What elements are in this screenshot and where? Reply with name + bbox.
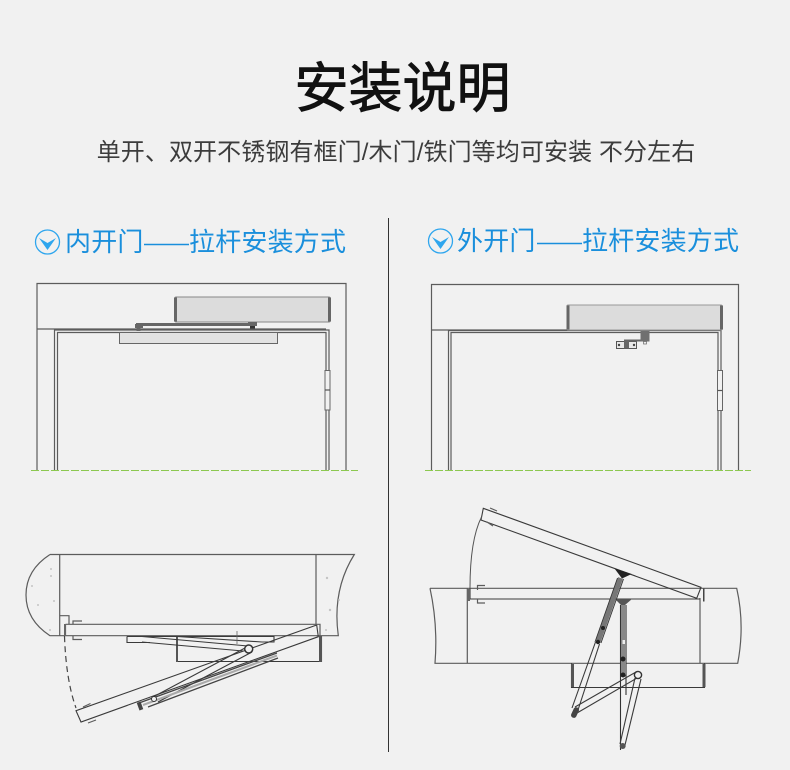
heading: outward door: [428, 226, 739, 256]
closer: [572, 663, 704, 688]
heading: inward door: 拉杆安装方式: [189, 227, 346, 257]
heading: inward door: 内开门: [65, 227, 144, 257]
elevation: inward door with pull arm: [31, 284, 358, 470]
wall texture: [31, 568, 340, 631]
black fork on open door: [614, 568, 632, 578]
title: 安装说明: [294, 59, 510, 119]
closed door: [66, 624, 320, 636]
subtitle: 单开、双开不锈钢有框门/木门/铁门等均可安装 不分左右: [97, 139, 695, 166]
pull arm: [135, 322, 257, 331]
center divider: [388, 218, 390, 752]
wall: [26, 554, 354, 636]
track: [120, 332, 278, 344]
wall: [430, 588, 741, 663]
plan view: inward door: [26, 554, 354, 723]
first arm: [142, 636, 248, 651]
swing arc: [470, 517, 482, 588]
hinge: [718, 370, 722, 410]
track: [127, 636, 274, 642]
open door: [76, 625, 318, 722]
heading: outward door: 外开门: [457, 226, 536, 256]
arm A: [598, 578, 620, 642]
hinge: [325, 370, 330, 410]
bracket and arm: [616, 330, 650, 348]
fork on frame: [615, 599, 632, 605]
plan view: outward door: [430, 508, 741, 750]
heading: inward door: [36, 227, 346, 257]
closed door: [470, 588, 700, 599]
open door: [481, 508, 701, 598]
link arm: [575, 672, 637, 713]
vertical track: [620, 605, 626, 750]
elevation: outward door with pull arm: [425, 284, 751, 470]
closer body: [174, 297, 331, 322]
second arm and track: [153, 648, 252, 702]
closer body: [566, 305, 723, 330]
heading: outward door: 拉杆安装方式: [582, 226, 739, 256]
lower arm: [620, 678, 641, 745]
pivot: [245, 645, 253, 653]
closer: [177, 636, 322, 662]
swing arc: [64, 636, 76, 708]
